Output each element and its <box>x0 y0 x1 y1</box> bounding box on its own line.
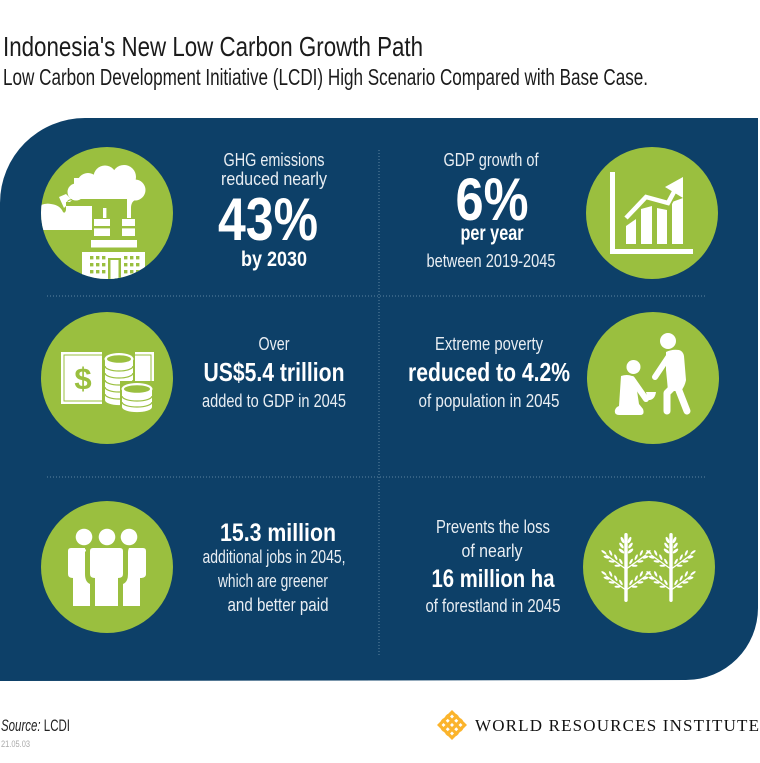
text: forestland: of forestland in 2045 <box>426 596 560 616</box>
panel: key findings <box>0 118 758 681</box>
text: forestland: Prevents the loss <box>436 517 550 537</box>
text: extreme poverty: Extreme poverty <box>435 334 543 354</box>
text: jobs: and better paid <box>228 595 328 615</box>
text: GHG emissions: 43% <box>218 186 318 253</box>
text: extreme poverty: of population in 2045 <box>418 391 560 411</box>
text: US$5.4 trillion <box>202 334 346 411</box>
text: jobs: 15.3 million <box>220 519 336 547</box>
logo: World Resources Institute <box>436 709 759 741</box>
text: jobs: which are greener <box>217 571 328 591</box>
text: GDP growth: between 2019-2045 <box>426 251 556 271</box>
text: jobs <box>202 519 346 615</box>
icon: banknote and coins: $ <box>74 361 92 396</box>
text: forestland: of nearly <box>462 541 522 561</box>
icon: rising bar chart <box>586 147 718 279</box>
text: US$5.4 trillion: US$5.4 trillion <box>204 357 344 387</box>
text: US$5.4 trillion: Over <box>258 334 290 354</box>
text: GDP growth <box>426 150 556 271</box>
icon: banknote and coins <box>41 312 173 444</box>
text: GHG emissions <box>218 150 327 271</box>
icon: person giving to kneeling person <box>587 312 719 444</box>
text: forestland: 16 million ha <box>432 565 555 593</box>
text: extreme poverty: reduced to 4.2% <box>408 357 570 387</box>
text: extreme poverty <box>408 334 570 411</box>
icon: two young trees <box>583 501 715 633</box>
text: US$5.4 trillion: added to GDP in 2045 <box>202 391 346 411</box>
text: GHG emissions: by 2030 <box>241 248 307 271</box>
source note: Source: LCDI <box>1 716 70 735</box>
date stamp: 21.05.03 <box>1 739 30 749</box>
icon: lattice diamond <box>436 709 468 741</box>
icon: factory with smoke <box>41 147 173 282</box>
text: jobs: additional jobs in 2045, <box>202 547 346 567</box>
icon: group of three people <box>41 501 173 633</box>
text: forestland <box>426 517 560 616</box>
title: Indonesia's New Low Carbon Growth Path <box>3 31 423 62</box>
text: GHG emissions: reduced nearly <box>221 169 327 189</box>
text: GDP growth: per year <box>460 222 524 245</box>
logo: World Resources Institute: WORLD RESOURCES INSTITUTE <box>475 716 759 735</box>
text: GHG emissions: GHG emissions <box>224 150 324 170</box>
text: GDP growth: 6% <box>456 166 528 233</box>
text: GDP growth: GDP growth of <box>444 150 539 170</box>
